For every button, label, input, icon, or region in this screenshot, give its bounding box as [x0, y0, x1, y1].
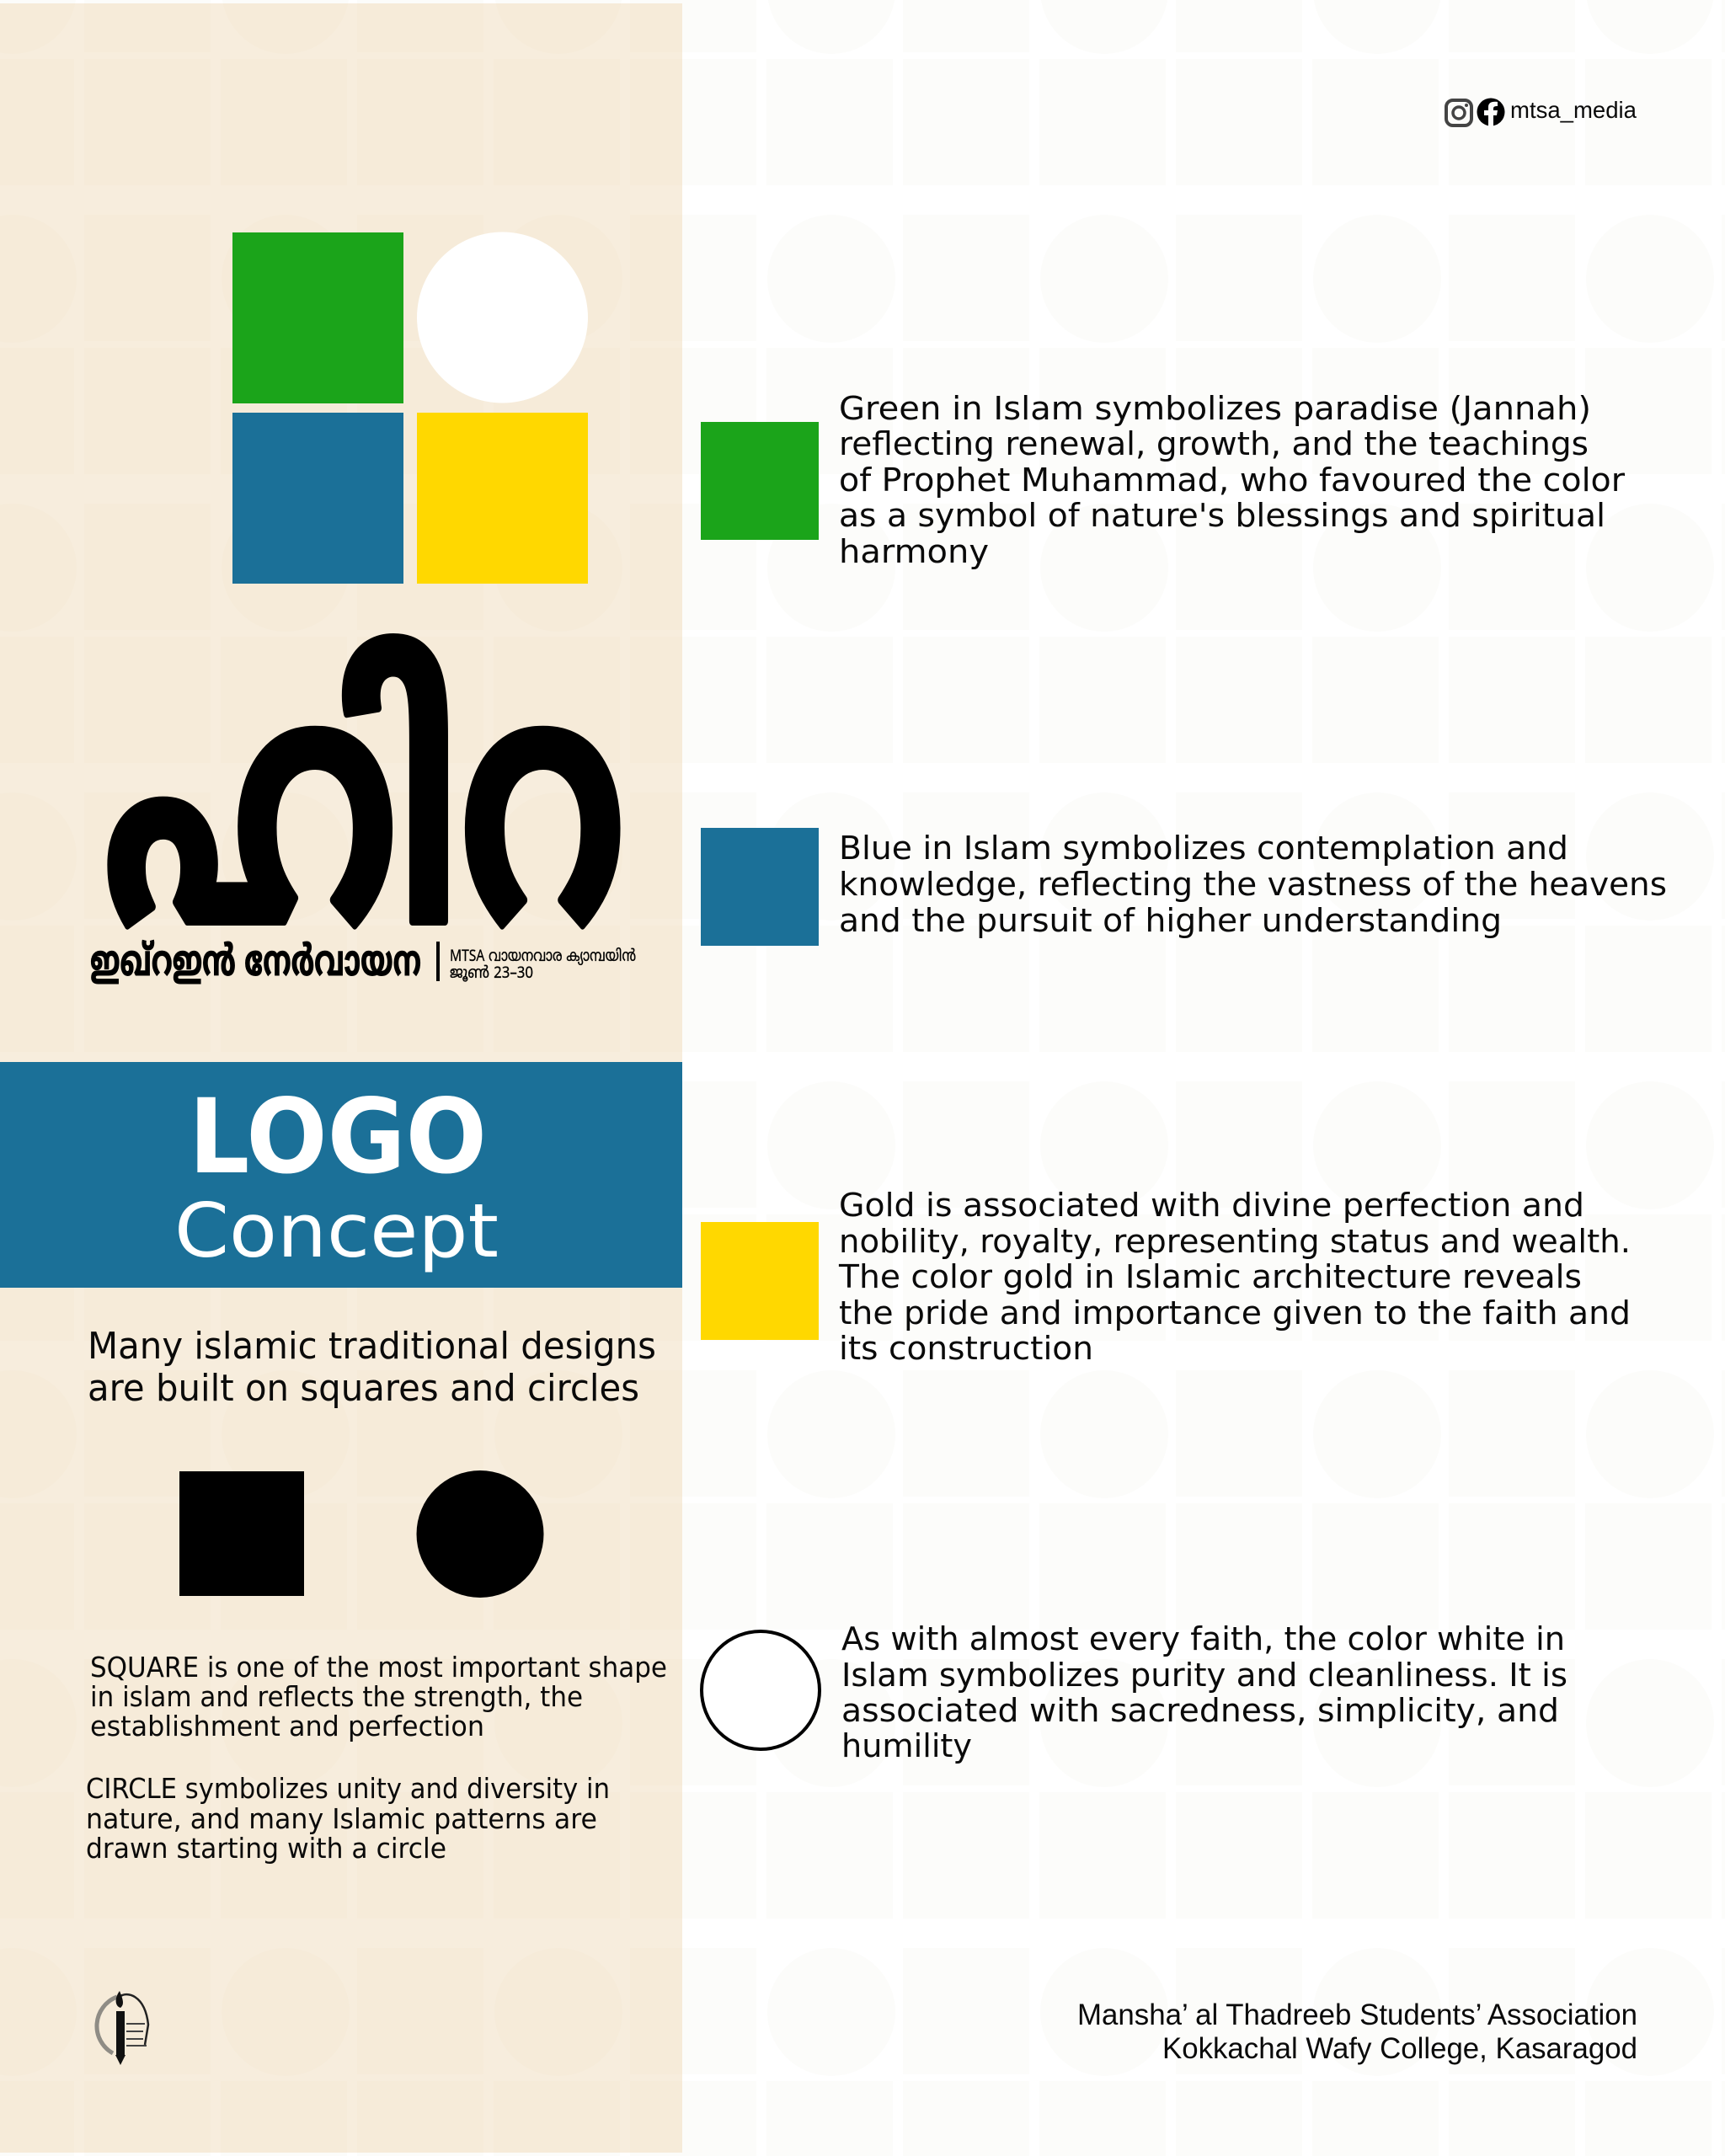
text: green meaning: reflecting renewal, growth, and the teachings: [839, 425, 1589, 462]
intro text: are built on squares and circles: [88, 1367, 639, 1410]
text: gold meaning: its construction: [839, 1330, 1093, 1367]
icon: black circle: [416, 1470, 544, 1598]
logo wordmark: Hira in Malayalam: ഹിറ: [104, 633, 626, 1049]
social handle: mtsa_media: [1510, 97, 1637, 123]
text: gold meaning: Gold is associated with divine perfection and: [839, 1187, 1584, 1224]
text: circle meaning: nature, and many Islamic patterns are: [86, 1802, 597, 1835]
logo mark: four colour shapes: [232, 232, 588, 584]
text: white meaning: humility: [841, 1727, 972, 1764]
text: green meaning: as a symbol of nature's blessings and spiritual: [839, 497, 1605, 534]
text: gold meaning: nobility, royalty, representing status and wealth.: [839, 1223, 1631, 1260]
text: circle meaning: drawn starting with a circle: [86, 1832, 446, 1865]
text: blue meaning: [839, 830, 1667, 939]
text: square meaning: [90, 1651, 667, 1742]
swatch: blue: [701, 828, 819, 946]
text: blue meaning: and the pursuit of higher understanding: [839, 902, 1502, 939]
logo tagline: ഇഖ്റഇൻ നേർവായന: [90, 940, 421, 992]
text: square meaning: in islam and reflects the strength, the: [90, 1680, 583, 1713]
text: blue meaning: Blue in Islam symbolizes contemplation and: [839, 830, 1568, 867]
footer: association name: Mansha’ al Thadreeb Students’ Association: [1077, 1999, 1637, 2031]
text: circle meaning: CIRCLE symbolizes unity and diversity in: [86, 1772, 610, 1805]
text: white meaning: As with almost every faith, the color white in: [841, 1620, 1565, 1657]
intro text: [88, 1325, 656, 1410]
footer: association name: Kokkachal Wafy College, Kasaragod: [1162, 2032, 1637, 2065]
text: square meaning: establishment and perfection: [90, 1710, 484, 1742]
swatch: green: [701, 422, 819, 540]
banner: Logo Concept: [0, 1062, 682, 1288]
text: white meaning: [841, 1620, 1567, 1764]
text: square meaning: SQUARE is one of the most important shape: [90, 1651, 667, 1684]
text: green meaning: of Prophet Muhammad, who favoured the color: [839, 462, 1625, 499]
text: green meaning: [839, 390, 1625, 570]
tagline divider: [436, 942, 440, 981]
campaign details: MTSA വായനവാര ക്യാമ്പയിൻ: [450, 947, 636, 968]
swatch: gold: [701, 1222, 819, 1340]
campaign details: [450, 947, 636, 985]
banner: Logo Concept: LOGO: [189, 1077, 487, 1197]
intro text: Many islamic traditional designs: [88, 1325, 656, 1368]
icon: facebook: [1477, 98, 1504, 126]
text: gold meaning: [838, 1187, 1631, 1367]
icon: association emblem: [97, 1991, 148, 2065]
panel: left beige column: [0, 3, 682, 2153]
swatch: white circle: [702, 1631, 820, 1749]
text: green meaning: Green in Islam symbolizes paradise (Jannah): [839, 390, 1591, 427]
text: blue meaning: knowledge, reflecting the vastness of the heavens: [839, 866, 1667, 903]
banner: Logo Concept: Concept: [174, 1187, 499, 1274]
text: white meaning: Islam symbolizes purity and cleanliness. It is: [841, 1657, 1567, 1694]
footer: association name: [1077, 1999, 1637, 2065]
text: gold meaning: the pride and importance given to the faith and: [839, 1294, 1631, 1331]
text: green meaning: harmony: [839, 533, 989, 570]
icon: black square: [179, 1471, 304, 1596]
text: gold meaning: The color gold in Islamic architecture reveals: [838, 1258, 1582, 1295]
campaign details: ജൂൺ 23–30: [450, 964, 533, 985]
icon: instagram: [1446, 100, 1471, 125]
text: white meaning: associated with sacredness, simplicity, and: [841, 1692, 1559, 1729]
text: circle meaning: [86, 1772, 610, 1865]
